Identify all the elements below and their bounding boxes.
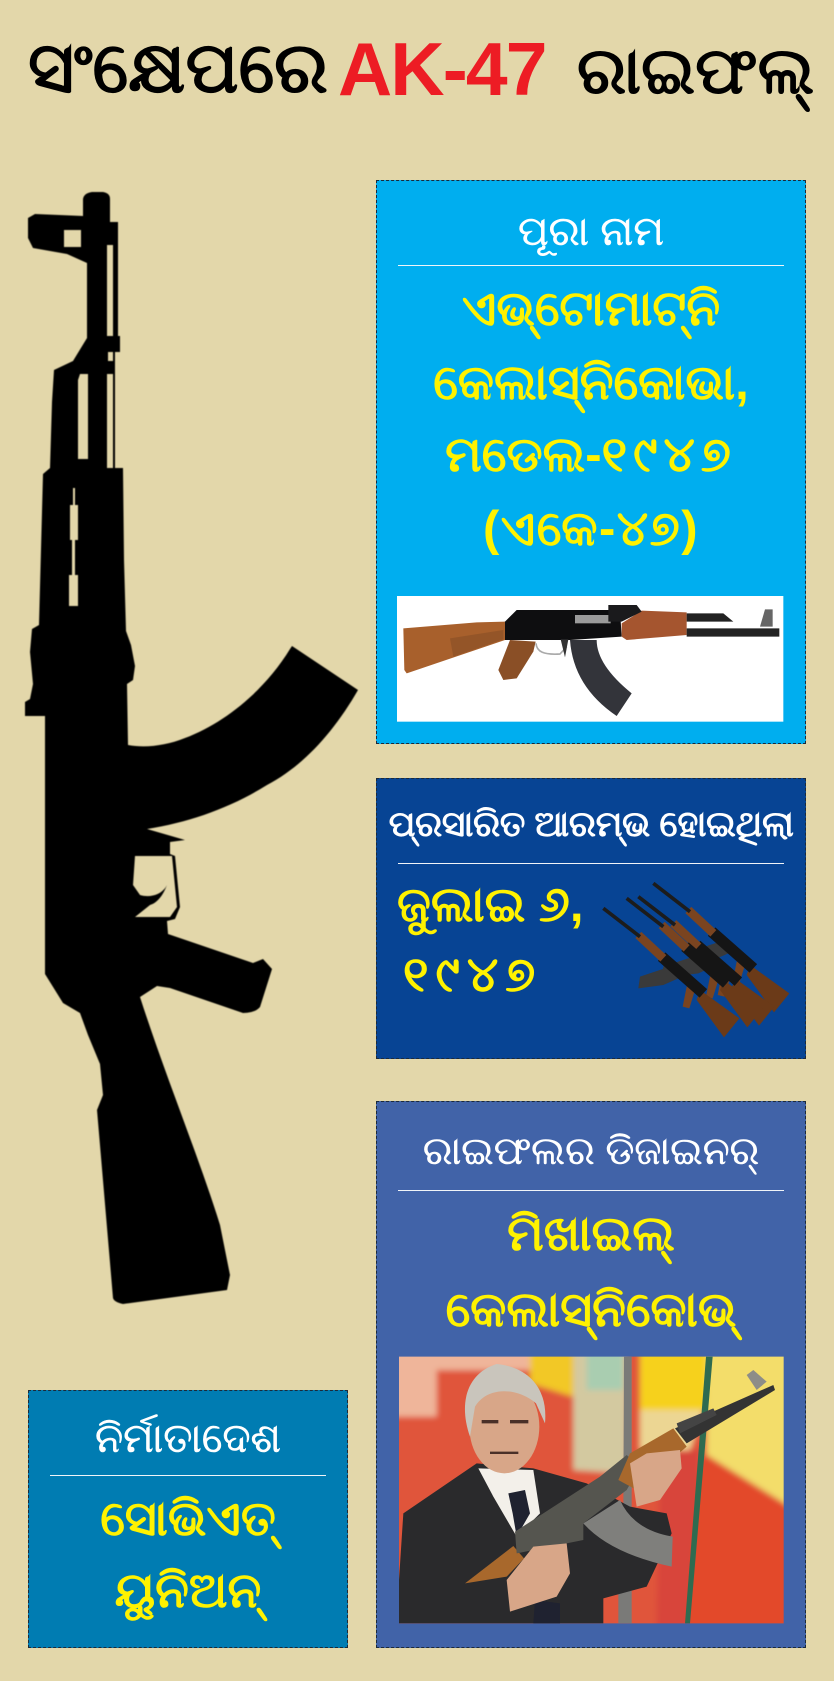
designer name text: [446, 1207, 742, 1340]
full name text: କେଲ‌ାସ୍ନିକୋଭା,: [433, 356, 749, 410]
title: ର‌ାଇଫଲ୍: [577, 34, 814, 107]
full name text: ଏଭ୍ଟୋମାଟ୍ନି: [462, 282, 720, 336]
country name text: ୟୁନିଅନ୍: [115, 1564, 261, 1618]
photo: designer with rifle: [399, 1356, 784, 1624]
date text: [397, 878, 583, 1002]
full name text: ମଡେଲ-୧୯୪୭: [445, 428, 737, 482]
panel: designer: [376, 1101, 806, 1648]
icon: rifle silhouette: [24, 191, 358, 1305]
heading: service start: ପ୍ରସାରିତ ଆରମ୍ଭ ହୋଇଥିଲା: [389, 803, 793, 844]
heading: country: ନିର୍ମାତ‌ାଦେଶ: [95, 1415, 281, 1461]
photo: four rifles: [602, 882, 790, 1038]
panel: full name: [376, 180, 806, 744]
designer name text: କେଲ‌ାସ୍ନିକୋଭ୍: [446, 1283, 736, 1337]
heading: designer: ର‌ାଇଫଲର ଡିଜାଇନର୍: [423, 1130, 759, 1173]
title: [28, 27, 814, 112]
country name text: [100, 1492, 282, 1622]
heading: full name: ପୂର‌ା ନାମ: [518, 208, 664, 254]
full name text: (ଏକେ-୪୭): [483, 502, 699, 556]
country name text: ସୋଭିଏତ୍: [100, 1492, 276, 1546]
full name text: [433, 282, 749, 556]
title: AK-47: [338, 27, 546, 111]
photo: AK-47 side view: [397, 596, 784, 722]
designer name text: ମିଖାଇଲ୍: [507, 1207, 675, 1261]
panel: service start: [376, 778, 806, 1059]
date text: ଜୁଲ‌ାଇ ୬,: [397, 878, 583, 932]
date text: ୧୯୪୭: [403, 948, 542, 1002]
title: ସଂକ୍ଷେପରେ: [28, 29, 328, 108]
panel: country of manufacture: [28, 1390, 348, 1648]
